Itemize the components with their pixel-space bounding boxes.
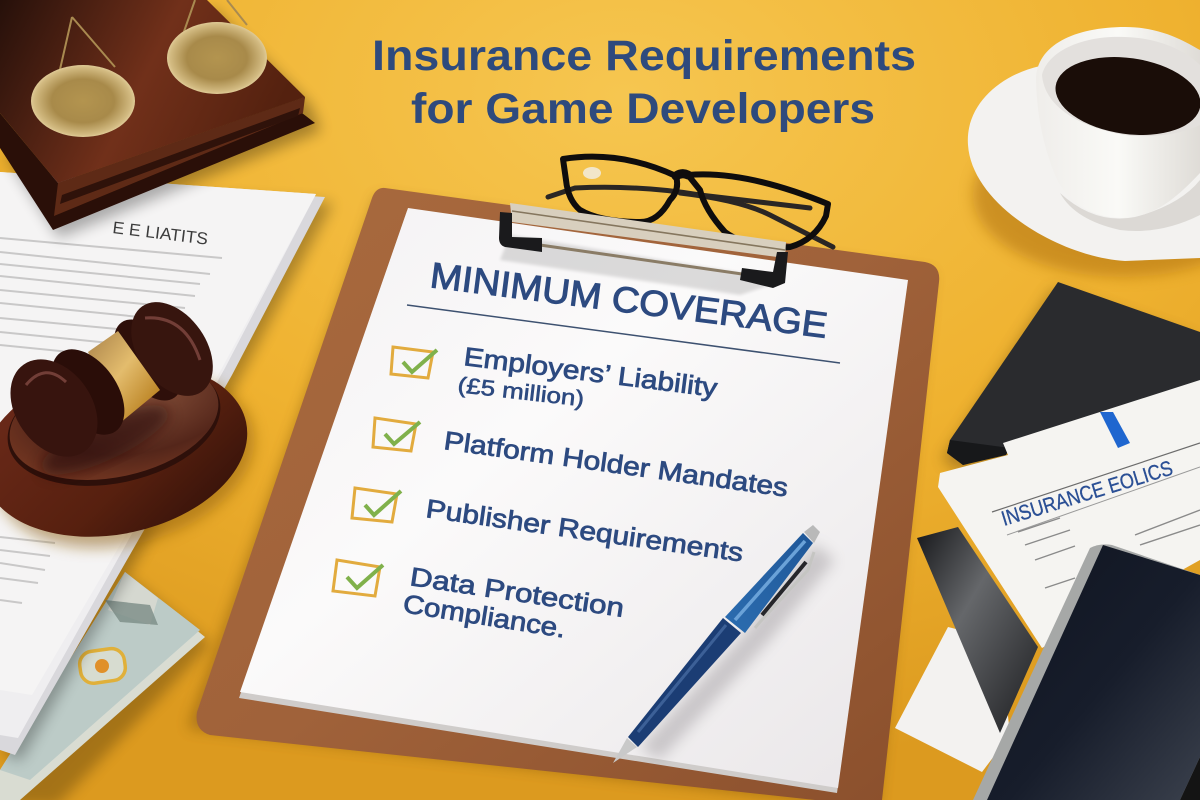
checklist item 4: Compliance.: [401, 588, 568, 644]
document heading: E E LIATITS: [112, 218, 209, 249]
checklist item 4: Data Protection: [408, 561, 626, 623]
banknotes: [0, 572, 210, 800]
wooden scales base: [0, 0, 321, 238]
saucer: [968, 66, 1200, 261]
checklist item 3: Publisher Requirements: [424, 493, 745, 567]
clip left foot: [499, 212, 542, 252]
checklist item 4: [333, 560, 626, 644]
title: Insurance Requirements: [372, 32, 916, 80]
paper sheet: [239, 208, 908, 793]
clip right foot: [740, 252, 788, 288]
checklist item 1: [391, 341, 719, 411]
smartphone: [973, 544, 1200, 800]
policy heading: INSURANCE EOLICS: [999, 457, 1176, 531]
title: [372, 32, 916, 133]
brass scale pans: [31, 0, 267, 137]
sound block: [0, 340, 264, 560]
checklist item 1: Employers’ Liability: [462, 341, 719, 403]
checklist item 3: [352, 488, 745, 567]
gavel head: [0, 287, 230, 488]
title: for Game Developers: [411, 85, 875, 133]
eyeglasses: [548, 157, 833, 247]
coffee: [1050, 48, 1200, 144]
cup: [1036, 27, 1200, 218]
clipboard clip: [499, 203, 788, 295]
insurance policy document: [938, 380, 1200, 648]
coffee cup and saucer: [968, 27, 1200, 277]
black notebook: [942, 282, 1200, 471]
clipboard: [188, 188, 939, 800]
coverage heading: MINIMUM COVERAGE: [428, 254, 830, 346]
lower white paper: [895, 627, 1010, 772]
left legal documents: [0, 172, 333, 761]
banknote emblem: [78, 647, 127, 685]
blue paper clip: [1100, 412, 1130, 448]
gavel and sound block: [0, 287, 274, 575]
black folder: [917, 527, 1038, 733]
checklist item 1: (£5 million): [456, 372, 585, 411]
blue pen: [613, 525, 835, 763]
checklist item 2: Platform Holder Mandates: [442, 425, 790, 503]
checklist item 2: [373, 418, 790, 503]
